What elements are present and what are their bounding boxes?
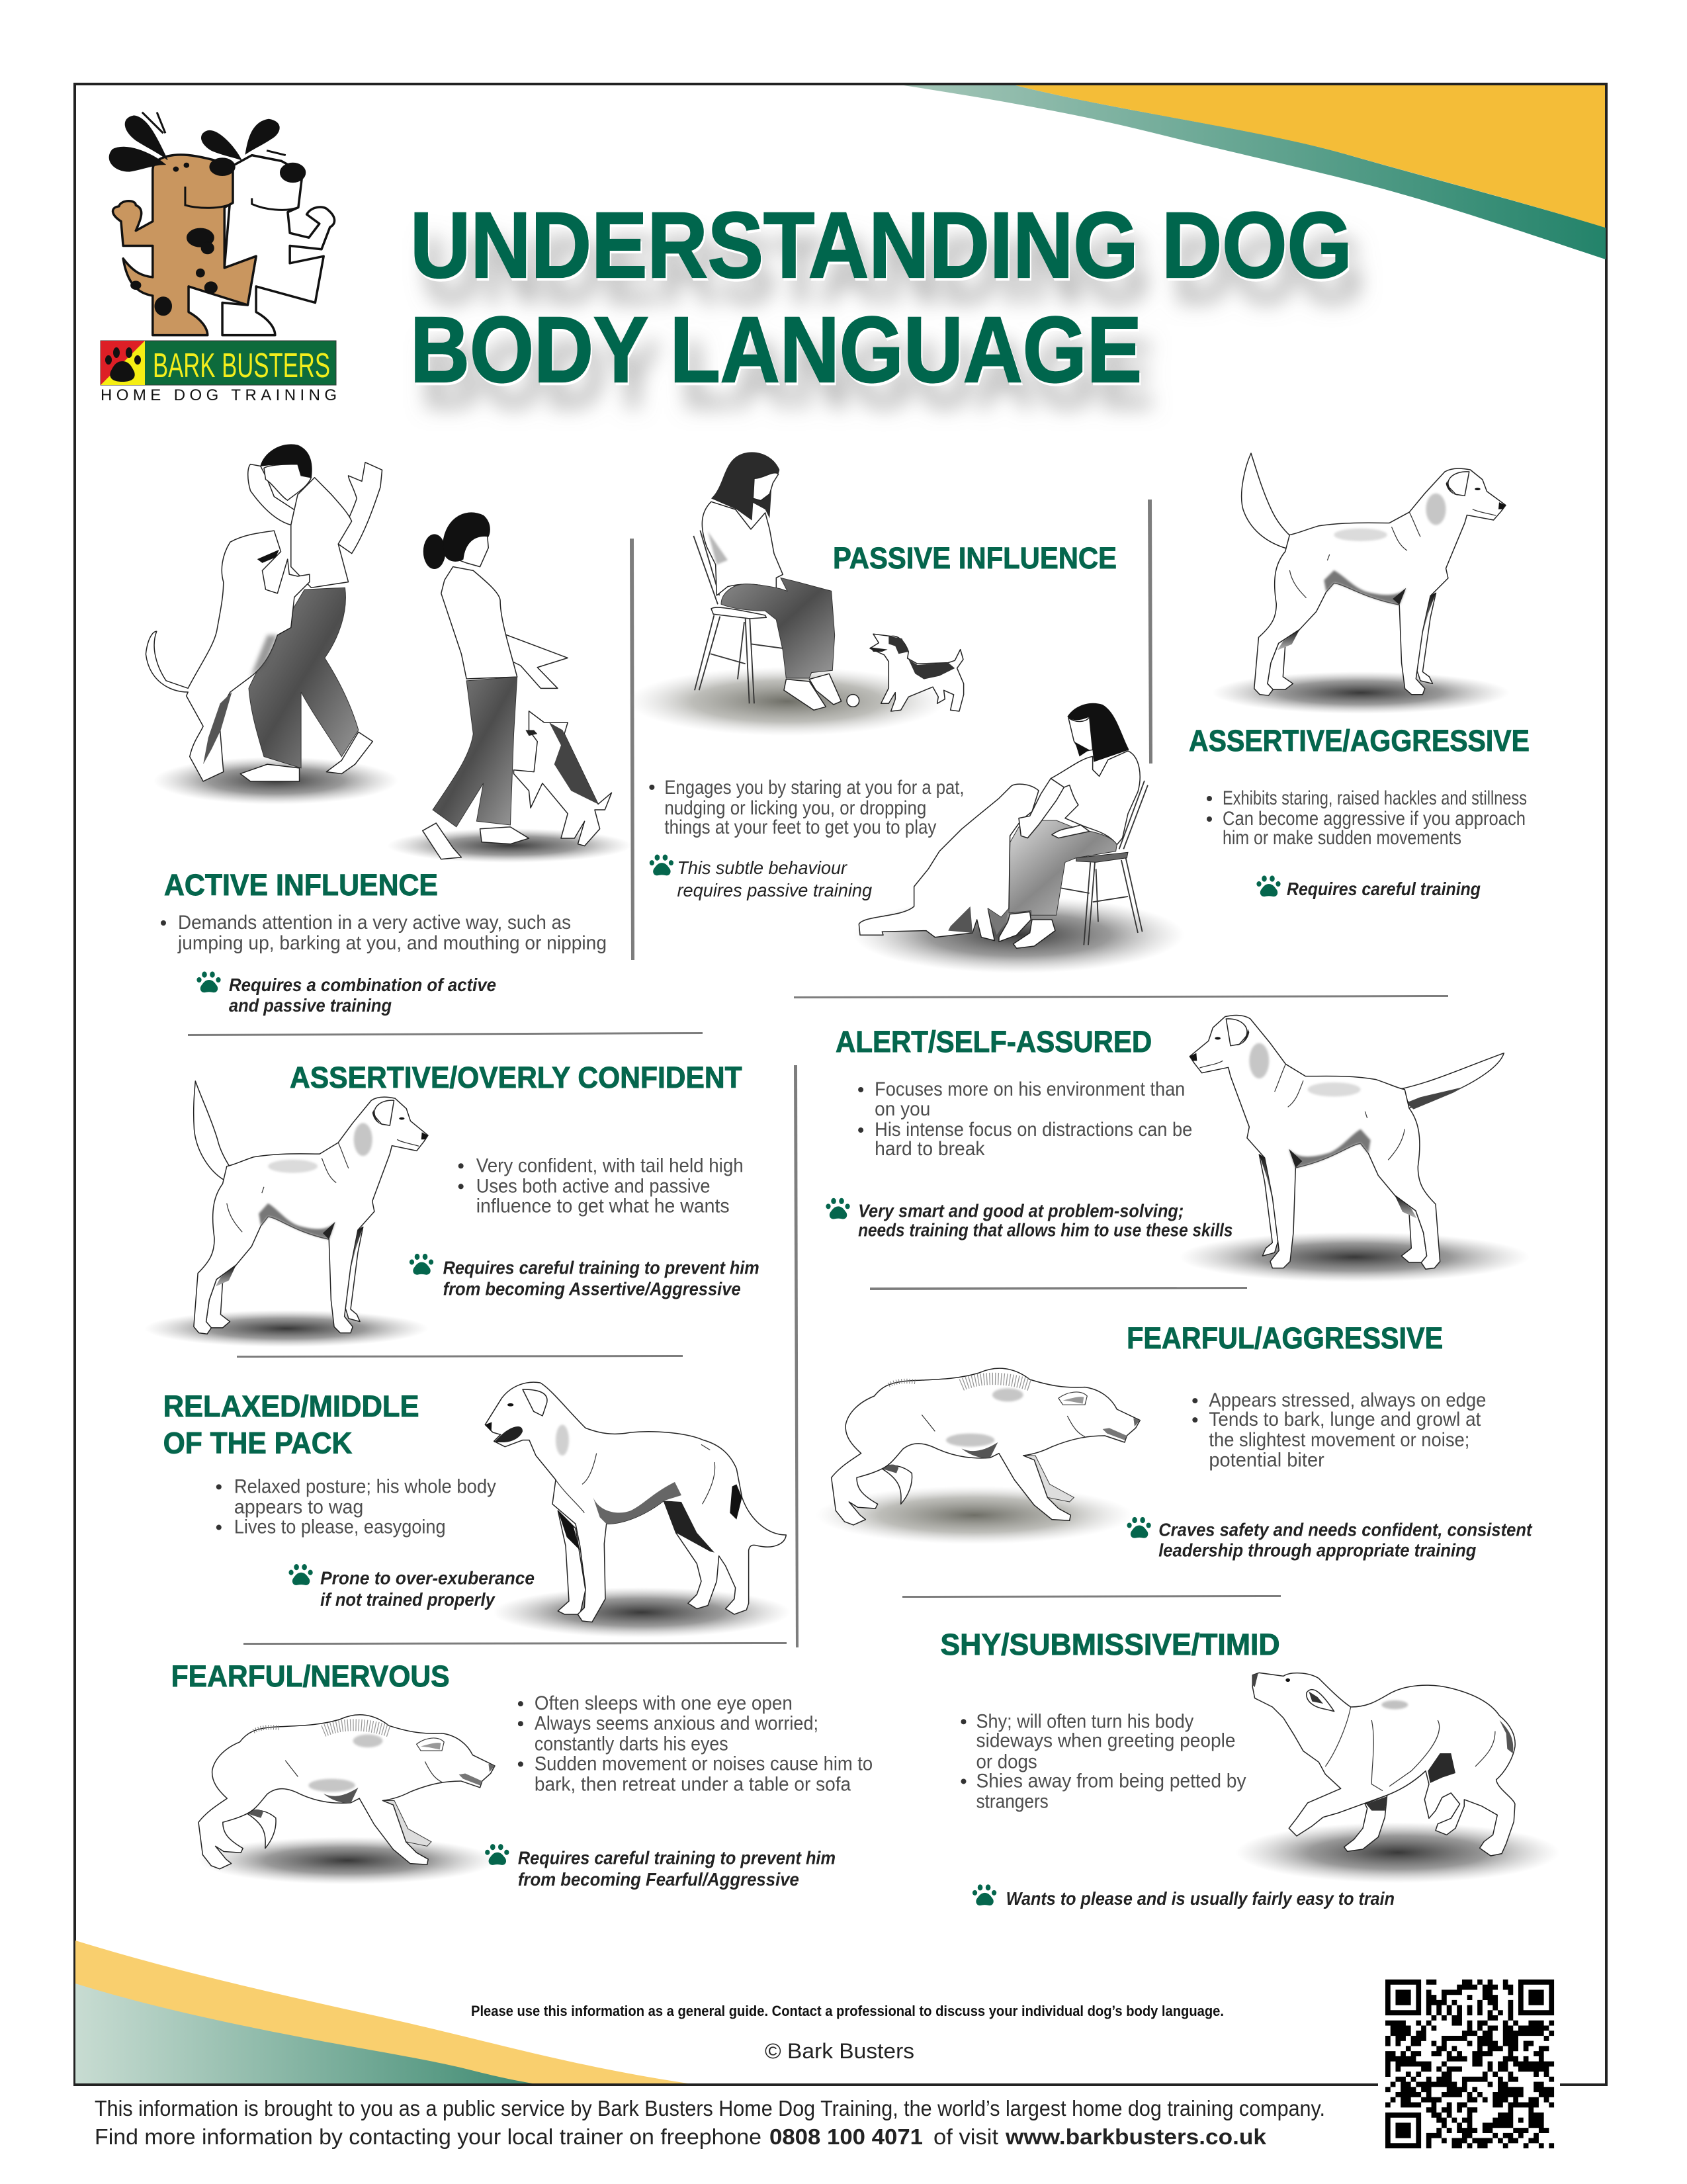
illustration: crouched aggressive dog — [816, 1368, 1140, 1544]
title — [410, 193, 1352, 402]
training note — [485, 1844, 836, 1890]
bullet list: Shies away from being petted by — [976, 1770, 1246, 1792]
illustration: nervous dog — [198, 1715, 496, 1884]
bullet list: sideways when greeting people — [976, 1729, 1235, 1751]
bullet list: the slightest movement or noise; — [1209, 1429, 1469, 1451]
illustration: seated woman ignoring dog — [628, 452, 964, 736]
disclaimer: Please use this information as a general guide. Contact a professional to discuss your individual dog’s body language. — [471, 2003, 1224, 2019]
footer text: www.barkbusters.co.uk — [1005, 2124, 1267, 2149]
training note: Very smart and good at problem-solving; — [858, 1200, 1184, 1221]
bullet list: His intense focus on distractions can be — [875, 1119, 1192, 1141]
panel: active influence — [146, 445, 632, 1016]
title: BODY LANGUAGE — [410, 297, 1142, 402]
heading: RELAXED/MIDDLE — [163, 1389, 419, 1423]
logo dogs — [109, 112, 335, 335]
divider: vertical right — [1148, 500, 1152, 764]
illustration: seated woman petting dog — [853, 703, 1184, 973]
bullet list — [1192, 1389, 1486, 1471]
bullet list — [1207, 787, 1527, 849]
footer text: This information is brought to you as a public service by Bark Busters Home Dog Training, the world’s largest home dog training company. — [95, 2096, 1325, 2120]
panel: assertive/overly confident — [144, 1061, 759, 1347]
divider: horizontal — [794, 995, 1448, 998]
training note — [650, 854, 873, 900]
illustration: alert dog — [1179, 1015, 1530, 1282]
bullet list: Always seems anxious and worried; — [535, 1712, 818, 1734]
bullet list: hard to break — [875, 1138, 985, 1160]
bullet list: constantly darts his eyes — [535, 1733, 728, 1755]
logo banner — [101, 341, 336, 385]
bullet list: Exhibits staring, raised hackles and stillness — [1223, 787, 1527, 809]
heading: ALERT/SELF-ASSURED — [836, 1025, 1152, 1059]
bullet list: Very confident, with tail held high — [476, 1155, 744, 1176]
panel: fearful/nervous — [171, 1659, 873, 1890]
training note: and passive training — [229, 995, 392, 1016]
training note — [826, 1198, 1233, 1240]
heading: ACTIVE INFLUENCE — [164, 868, 438, 902]
QR code — [1378, 1973, 1560, 2155]
bullet list: Engages you by staring at you for a pat, — [664, 777, 964, 799]
training note: Requires careful training — [1287, 879, 1481, 899]
bullet list: influence to get what he wants — [476, 1195, 730, 1217]
divider: horizontal — [243, 1642, 787, 1645]
heading — [163, 1389, 419, 1460]
bullet list — [858, 1078, 1192, 1160]
panel: alert/self-assured — [826, 1015, 1530, 1282]
bullet list — [518, 1692, 873, 1795]
bullet list: jumping up, barking at you, and mouthing or nipping — [177, 932, 607, 954]
training note: requires passive training — [677, 880, 873, 900]
training note — [288, 1564, 535, 1610]
panel: passive influence — [628, 452, 1184, 973]
bullet list: things at your feet to get you to play — [664, 816, 936, 838]
bullet list: strangers — [976, 1791, 1049, 1813]
training note — [1256, 875, 1481, 899]
divider: horizontal — [902, 1595, 1281, 1598]
bottom swoosh — [75, 1941, 688, 2083]
bullet list: on you — [875, 1098, 930, 1120]
copyright: © Bark Busters — [765, 2039, 914, 2063]
bullet list: Can become aggressive if you approach — [1223, 808, 1526, 830]
illustration: relaxed dog — [485, 1382, 791, 1638]
training note: Prone to over-exuberance — [320, 1568, 535, 1589]
divider: vertical left — [630, 539, 634, 960]
footer text: 0808 100 4071 — [769, 2124, 923, 2149]
training note: Requires careful training to prevent him — [443, 1258, 759, 1278]
bullet list: or dogs — [976, 1751, 1037, 1772]
training note: Requires careful training to prevent him — [518, 1848, 836, 1868]
heading: OF THE PACK — [163, 1426, 353, 1460]
bullet list: Sudden movement or noises cause him to — [535, 1753, 873, 1774]
training note: from becoming Assertive/Aggressive — [443, 1279, 741, 1299]
illustration: woman with small dog — [387, 513, 632, 863]
bullet list — [961, 1710, 1246, 1813]
training note: Craves safety and needs confident, consistent — [1158, 1520, 1533, 1540]
top swoosh — [904, 85, 1606, 259]
title: UNDERSTANDING DOG — [410, 193, 1352, 297]
bullet list: Demands attention in a very active way, such as — [178, 912, 571, 934]
bullet list — [161, 912, 607, 954]
bullet list: potential biter — [1209, 1449, 1324, 1471]
bullet list: Lives to please, easygoing — [234, 1516, 446, 1538]
bullet list: Often sleeps with one eye open — [535, 1692, 793, 1714]
illustration: shy dog — [1236, 1673, 1560, 1883]
illustration: man with jumping dog — [146, 445, 398, 805]
bullet list: bark, then retreat under a table or sofa — [535, 1773, 851, 1795]
bullet list: Uses both active and passive — [476, 1175, 711, 1197]
heading: FEARFUL/AGGRESSIVE — [1127, 1321, 1443, 1355]
bullet list: Focuses more on his environment than — [875, 1078, 1185, 1100]
illustration: dog with tail held high — [144, 1081, 429, 1347]
bullet list: nudging or licking you, or dropping — [664, 797, 926, 819]
training note: from becoming Fearful/Aggressive — [518, 1869, 799, 1890]
heading: PASSIVE INFLUENCE — [833, 541, 1117, 575]
training note: leadership through appropriate training — [1158, 1540, 1476, 1561]
training note: Wants to please and is usually fairly easy to train — [1006, 1888, 1395, 1909]
bullet list: him or make sudden movements — [1223, 827, 1461, 849]
logo tagline: HOME DOG TRAINING — [101, 386, 337, 404]
panel: relaxed/middle of the pack — [163, 1382, 791, 1638]
footer text: Find more information by contacting your local trainer on freephone — [95, 2124, 761, 2149]
panel: shy/submissive/timid — [940, 1628, 1560, 1909]
heading: FEARFUL/NERVOUS — [171, 1659, 450, 1693]
heading: SHY/SUBMISSIVE/TIMID — [940, 1628, 1280, 1661]
bullet list — [649, 777, 964, 838]
illustration: dog with raised tail — [1212, 453, 1510, 714]
logo — [101, 112, 337, 404]
bullet list: Tends to bark, lunge and growl at — [1209, 1409, 1481, 1430]
panel: fearful/aggressive — [816, 1321, 1533, 1561]
footer text — [95, 2096, 1325, 2149]
training note: This subtle behaviour — [677, 857, 848, 878]
training note — [1127, 1517, 1533, 1561]
bullet list — [216, 1475, 496, 1538]
bullet list: Appears stressed, always on edge — [1209, 1389, 1486, 1411]
bullet list: Relaxed posture; his whole body — [234, 1475, 496, 1497]
footer text: of visit — [933, 2124, 998, 2149]
heading: ASSERTIVE/OVERLY CONFIDENT — [290, 1061, 742, 1094]
divider: horizontal — [237, 1355, 683, 1358]
logo name: BARK BUSTERS — [153, 347, 330, 385]
bullet list — [458, 1155, 744, 1217]
divider: horizontal — [188, 1032, 703, 1036]
divider: horizontal — [870, 1287, 1247, 1290]
heading: ASSERTIVE/AGGRESSIVE — [1189, 724, 1530, 758]
bullet list: Shy; will often turn his body — [976, 1710, 1193, 1732]
training note — [196, 971, 496, 1016]
training note — [410, 1254, 759, 1299]
bullet list: appears to wag — [234, 1496, 363, 1518]
panel: assertive/aggressive — [1189, 453, 1530, 899]
training note: Requires a combination of active — [229, 975, 496, 995]
training note: needs training that allows him to use these skills — [858, 1219, 1233, 1240]
divider: vertical centre — [794, 1065, 799, 1647]
training note: if not trained properly — [320, 1589, 496, 1610]
